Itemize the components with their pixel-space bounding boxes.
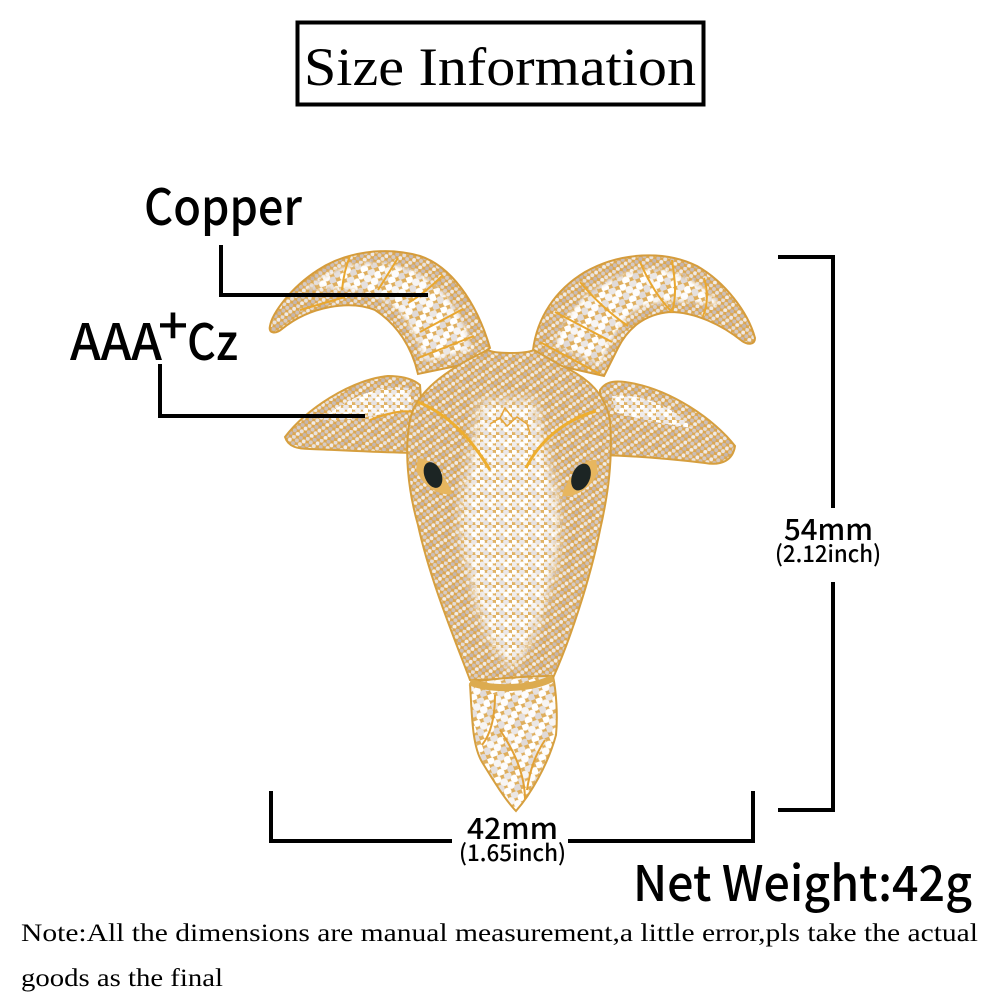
right ear	[600, 381, 735, 464]
right eye	[562, 460, 598, 496]
note: Note:All the dimensions are manual measurement,a little error,pls take the actual	[21, 920, 978, 947]
height dimension bracket: 54mm	[784, 507, 873, 549]
net weight: Net Weight:42g	[633, 845, 972, 916]
beard	[470, 676, 557, 811]
label: AAA+ Cz	[70, 287, 365, 416]
width dimension bracket: (1.65inch)	[459, 834, 566, 868]
title box: Size Information	[304, 37, 696, 97]
forehead star	[490, 408, 530, 433]
note: goods as the final	[21, 965, 223, 992]
label: AAA+ Cz: Cz	[187, 303, 238, 375]
height dimension bracket: (2.12inch)	[775, 535, 881, 569]
height dimension bracket	[775, 257, 881, 810]
goat head pendant	[270, 251, 755, 811]
width dimension bracket	[271, 791, 753, 868]
note	[21, 920, 978, 992]
left ear	[285, 376, 425, 453]
left horn	[270, 251, 490, 374]
left eye	[416, 458, 452, 494]
label: AAA+ Cz: AAA	[70, 303, 163, 375]
label: AAA+ Cz: +	[158, 287, 188, 359]
title box	[298, 22, 704, 104]
brow lines	[418, 402, 596, 470]
right horn	[533, 255, 755, 376]
label: Copper	[144, 168, 428, 295]
face	[407, 350, 611, 680]
label: Copper: Copper	[144, 168, 302, 240]
width dimension bracket: 42mm	[467, 806, 558, 848]
